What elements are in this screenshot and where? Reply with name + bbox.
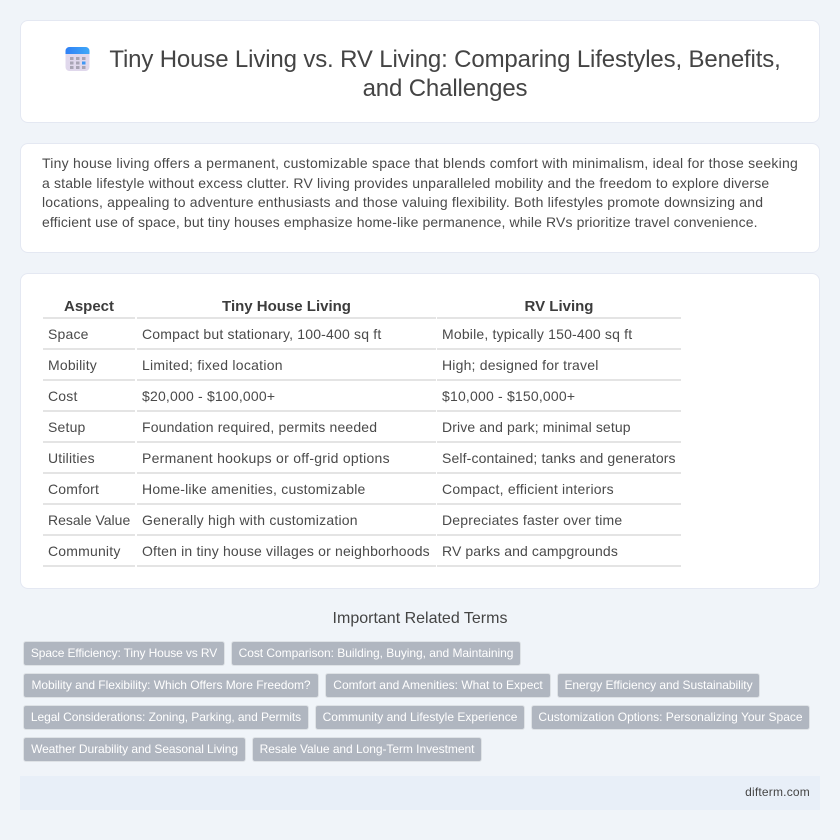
text block: introduction: Tiny house living offers a permanent, customizable space that blends comfort with minimalism, ideal for those seeking bbox=[42, 155, 798, 171]
text block: introduction: a stable lifestyle without excess clutter. RV living provides unparalleled mobility and the freedom to explore diverse bbox=[42, 175, 769, 191]
tag: Customization Options: Personalizing Your Space bbox=[538, 710, 803, 724]
row: Setup: Setup bbox=[48, 419, 86, 435]
row: Utilities bbox=[48, 450, 676, 466]
text block: introduction: locations, appealing to adventure enthusiasts and those valuing flexibility. Both lifestyles promote downsizing and bbox=[42, 194, 763, 210]
tag bbox=[23, 705, 309, 730]
row: Comfort bbox=[48, 481, 614, 497]
tag bbox=[557, 673, 760, 698]
tag bbox=[531, 705, 810, 730]
table header: Tiny House Living: Tiny House Living bbox=[222, 298, 351, 315]
tag: Cost Comparison: Building, Buying, and Maintaining bbox=[239, 646, 513, 660]
panel: header bbox=[20, 20, 820, 123]
row: Mobility: Limited; fixed location bbox=[142, 357, 283, 373]
title: Tiny House Living vs. RV Living: Comparing Lifestyles, Benefits, and Challenges bbox=[109, 46, 781, 102]
row: Mobility bbox=[48, 357, 599, 373]
footer bbox=[20, 776, 820, 810]
row: Space: Compact but stationary, 100-400 sq ft bbox=[142, 326, 381, 342]
row: Resale Value: Depreciates faster over time bbox=[442, 512, 622, 528]
row: Comfort: Compact, efficient interiors bbox=[442, 481, 614, 497]
tag bbox=[231, 641, 521, 666]
row: Utilities: Utilities bbox=[48, 450, 95, 466]
row: Resale Value: Generally high with customization bbox=[142, 512, 358, 528]
row: Community: Often in tiny house villages or neighborhoods bbox=[142, 543, 430, 559]
row: Setup: Foundation required, permits needed bbox=[142, 419, 377, 435]
row: Space: Space bbox=[48, 326, 89, 342]
tag: Community and Lifestyle Experience bbox=[323, 710, 517, 724]
row: Community: Community bbox=[48, 543, 121, 559]
table header: Aspect: Aspect bbox=[64, 298, 114, 315]
row: Comfort: Comfort bbox=[48, 481, 99, 497]
heading: related terms: Important Related Terms bbox=[333, 610, 507, 627]
row: Cost: Cost bbox=[48, 388, 78, 404]
text block: introduction: efficient use of space, but tiny houses emphasize home-like permanence, while RVs prioritize travel convenience. bbox=[42, 214, 758, 230]
tag: Comfort and Amenities: What to Expect bbox=[333, 678, 543, 692]
panel: introduction bbox=[20, 143, 820, 253]
row: Setup bbox=[48, 419, 631, 435]
row: Community: RV parks and campgrounds bbox=[442, 543, 618, 559]
row: Mobility: Mobility bbox=[48, 357, 97, 373]
tag bbox=[325, 673, 551, 698]
row: Resale Value bbox=[48, 512, 622, 528]
tag bbox=[23, 673, 319, 698]
row: Setup: Drive and park; minimal setup bbox=[442, 419, 631, 435]
footer link: difterm.com bbox=[745, 785, 810, 799]
tag: Mobility and Flexibility: Which Offers More Freedom? bbox=[31, 678, 311, 692]
panel: comparison table bbox=[20, 273, 820, 589]
row: Resale Value: Resale Value bbox=[48, 512, 130, 528]
row: Cost bbox=[48, 388, 575, 404]
row: Utilities: Self-contained; tanks and generators bbox=[442, 450, 676, 466]
tag bbox=[23, 641, 225, 666]
row: Space bbox=[48, 326, 632, 342]
tag: Energy Efficiency and Sustainability bbox=[564, 678, 753, 692]
row: Utilities: Permanent hookups or off-grid options bbox=[142, 450, 390, 466]
tag: Resale Value and Long-Term Investment bbox=[260, 742, 474, 756]
row: Community bbox=[48, 543, 618, 559]
tag: Weather Durability and Seasonal Living bbox=[31, 742, 238, 756]
tag bbox=[23, 737, 246, 762]
row: Comfort: Home-like amenities, customizable bbox=[142, 481, 366, 497]
tag: Legal Considerations: Zoning, Parking, and Permits bbox=[31, 710, 301, 724]
tag: Space Efficiency: Tiny House vs RV bbox=[31, 646, 217, 660]
table header: RV Living: RV Living bbox=[525, 298, 593, 315]
tag bbox=[315, 705, 525, 730]
icon: calendar bbox=[66, 47, 90, 71]
row: Cost: $10,000 - $150,000+ bbox=[442, 388, 575, 404]
row: Mobility: High; designed for travel bbox=[442, 357, 599, 373]
text block: introduction bbox=[42, 155, 798, 230]
tag bbox=[252, 737, 482, 762]
row: Space: Mobile, typically 150-400 sq ft bbox=[442, 326, 632, 342]
row: Cost: $20,000 - $100,000+ bbox=[142, 388, 275, 404]
